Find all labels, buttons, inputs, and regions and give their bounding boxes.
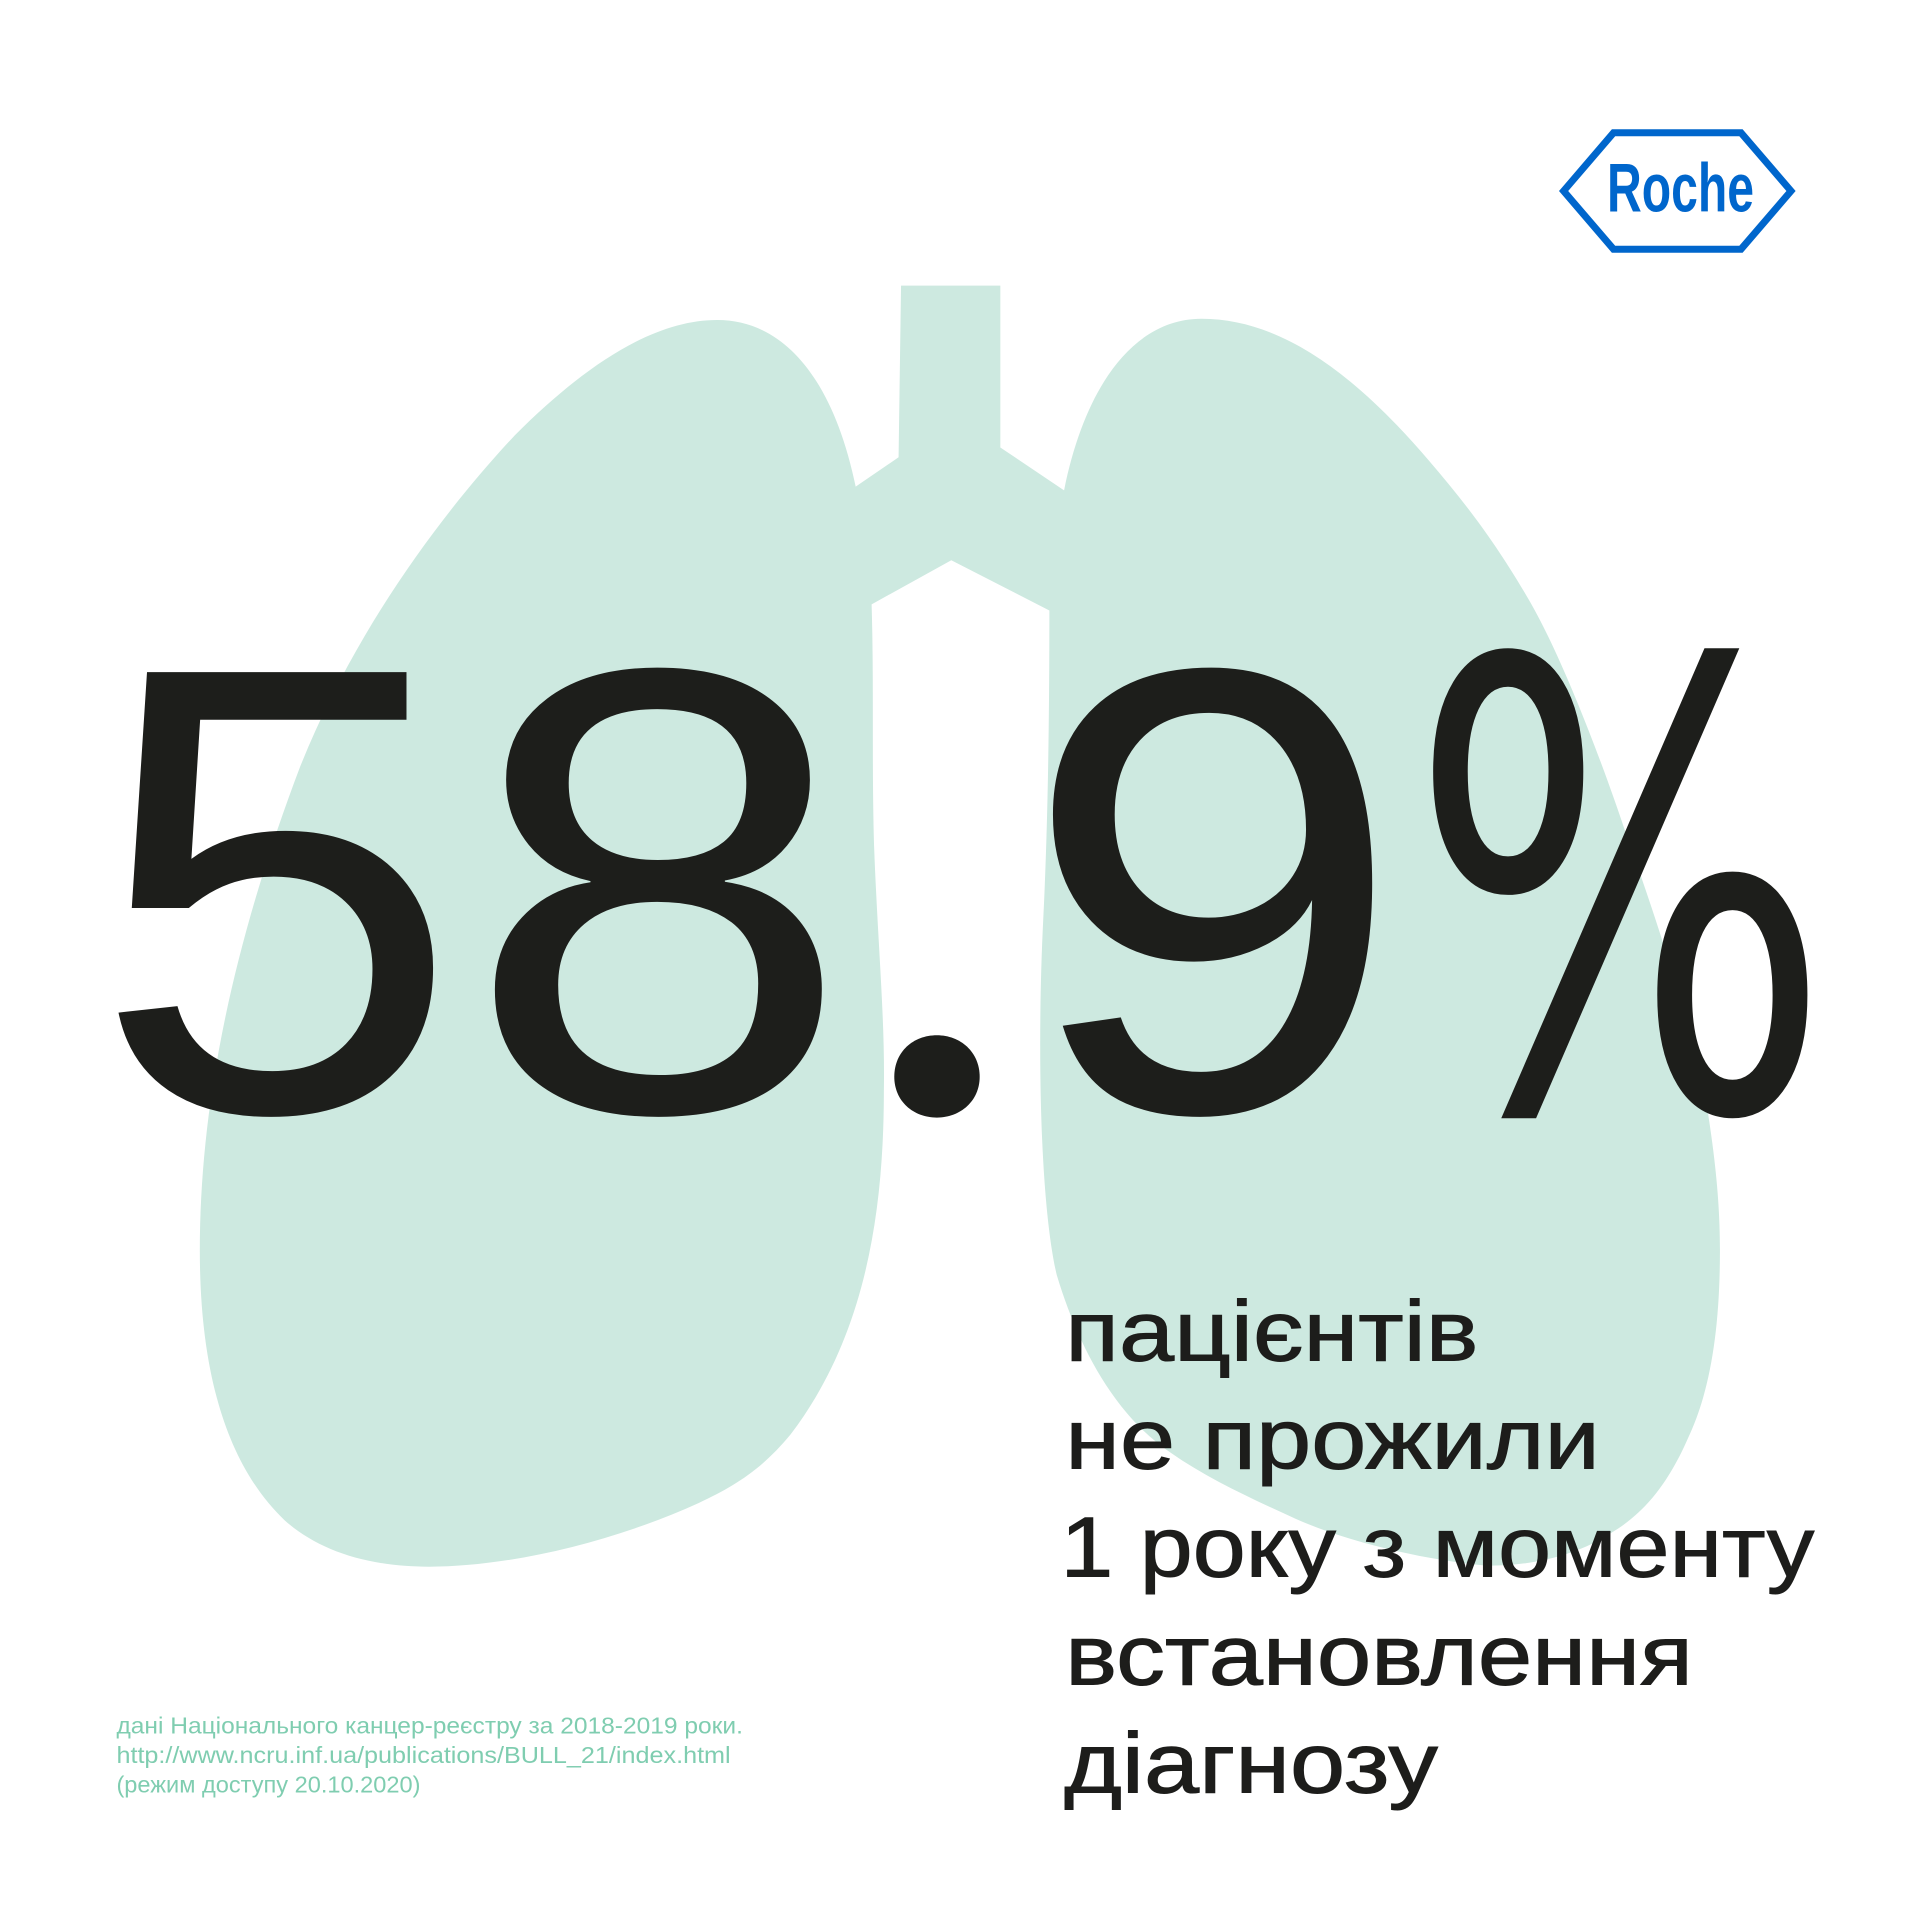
- line 4: встановлення: [1065, 1607, 1693, 1703]
- digit 8: 8: [465, 537, 852, 1246]
- footnote line 2: http://www.ncru.inf.ua/publications/BULL_21/index.html: [116, 1742, 731, 1768]
- digit 5: 5: [92, 534, 461, 1246]
- digit 9: 9: [1021, 536, 1405, 1246]
- line 2: не прожили: [1065, 1392, 1600, 1488]
- description text: [1060, 1284, 1814, 1811]
- logo wordmark: Roche: [1607, 150, 1754, 227]
- logo hexagon: [1564, 133, 1791, 249]
- Roche logo: [1564, 133, 1791, 249]
- decimal point: .: [847, 423, 1027, 1281]
- line 3: 1 року з моменту: [1060, 1500, 1814, 1596]
- footnote line 1: дані Національного канцер-реєстру за 2018-2019 роки.: [116, 1712, 743, 1738]
- percent sign: %: [1409, 533, 1832, 1257]
- lungs and trachea silhouette: [200, 286, 1720, 1567]
- line 1: пацієнтів: [1065, 1284, 1478, 1380]
- line 5: діагнозу: [1064, 1715, 1438, 1811]
- big statistic 58.9%: [92, 423, 1832, 1281]
- source footnote: [116, 1712, 743, 1797]
- footnote line 3: (режим доступу 20.10.2020): [116, 1771, 420, 1797]
